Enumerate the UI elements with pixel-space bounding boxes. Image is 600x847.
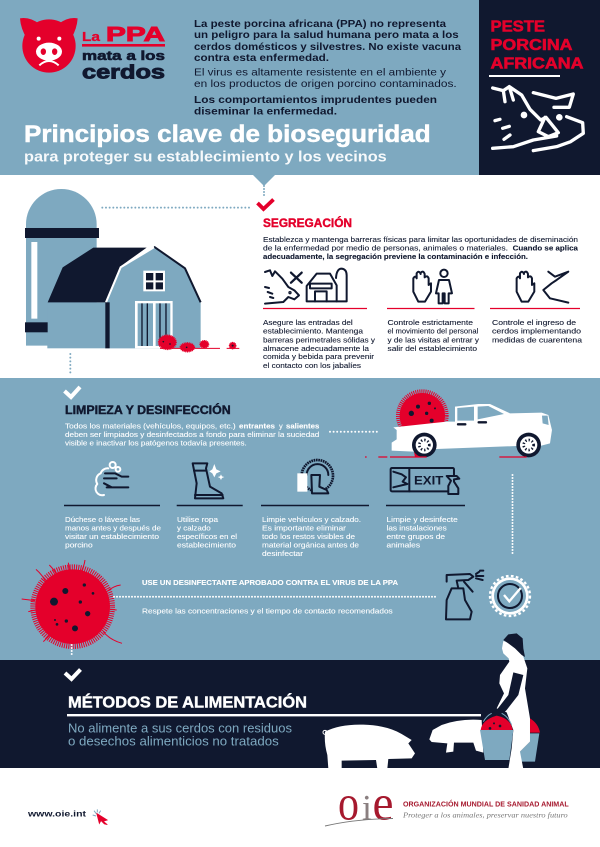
- text: shower or wash hands: porcino: [65, 540, 93, 550]
- logo: La PPA mata a los cerdos: [20, 18, 165, 84]
- text block: introduction: contra esta enfermedad.: [194, 53, 329, 64]
- icon: approval badge: [490, 576, 530, 616]
- text block: cleaning description: visible e inactivar los patógenos todavía presentes.: [65, 439, 247, 448]
- logo wordmark: [82, 24, 165, 84]
- text: use dedicated clothes: y calzado: [177, 524, 211, 532]
- logo wordmark: La: [82, 30, 101, 44]
- divider: feeding heading underline: [67, 714, 481, 716]
- dividers: segregation columns: [263, 308, 580, 310]
- heading: peste porcina africana: AFRICANA: [490, 55, 584, 72]
- text: control people movement: salir del establecimiento: [388, 344, 477, 353]
- text: control people movement: el movimiento del personal: [388, 327, 479, 336]
- text: use approved disinfectant: USE UN DESINFECTANTE APROBADO CONTRA EL VIRUS DE LA PPA: [142, 578, 399, 587]
- logo wordmark: mata a los: [82, 48, 165, 63]
- text block: cleaning description: Todos los materiales (vehículos, equipos, etc.): [65, 421, 236, 430]
- text: control pig entry: cerdos implementando: [492, 327, 581, 336]
- text: use dedicated clothes: específicos en el: [177, 532, 237, 541]
- arrow: notch and dotted connector: [253, 175, 275, 197]
- panel: header background: [0, 0, 479, 175]
- heading: cleaning and disinfection: LIMPIEZA Y DESINFECCIÓN: [65, 402, 231, 417]
- dividers: cleaning columns: [64, 504, 465, 506]
- heading: peste porcina africana: PESTE: [490, 19, 545, 36]
- illustration: pickup truck with virus: [365, 392, 552, 457]
- text: clean vehicles and footwear: material orgánica antes de: [262, 540, 359, 550]
- small pig: [429, 720, 483, 753]
- text: use dedicated clothes: [177, 515, 237, 550]
- illustration: barn and silo: [25, 189, 252, 373]
- text block: segregation description: [263, 235, 579, 261]
- logo wordmark: PPA: [106, 24, 165, 46]
- text block: introduction: El virus es altamente resistente en el ambiente y: [194, 67, 447, 78]
- heading: peste porcina africana: [490, 19, 584, 72]
- virus on truck bed: [398, 392, 446, 440]
- text: control people movement: Controle estrictamente: [388, 318, 473, 327]
- text: control people movement: [388, 318, 479, 353]
- icon: wild boar outline: [493, 87, 583, 151]
- text block: segregation description: de la enfermedad por medio de personas, animales o materiales.: [263, 244, 508, 252]
- text: clean facilities: entre grupos de: [386, 532, 445, 541]
- text block: segregation description: Establezca y mantenga barreras físicas para limitar las oportunidades de diseminación: [263, 235, 578, 244]
- logo: OIE: [325, 774, 569, 830]
- connector: dotted line to truck: [330, 431, 377, 433]
- heading: feeding methods: MÉTODOS DE ALIMENTACIÓN: [68, 694, 307, 712]
- heading: peste porcina africana: PORCINA: [490, 37, 573, 54]
- icon: hand washing: [95, 462, 128, 495]
- logo: OIE: o: [338, 774, 359, 830]
- icon: red cursor: [93, 809, 107, 825]
- text: use dedicated clothes: establecimiento: [177, 540, 236, 550]
- text: control pig entry: [492, 318, 583, 344]
- icon: hand and pig: [517, 272, 568, 303]
- text: secure farm entries: barreras perimetrales sólidas y: [263, 335, 375, 344]
- text: clean vehicles and footwear: Es importante eliminar: [262, 524, 347, 532]
- text block: introduction: La peste porcina africana (PPA) no representa: [194, 19, 446, 30]
- illustration: feeding scene: [323, 633, 540, 769]
- text: tagline: Proteger a los animales, preservar nuestro futuro: [402, 810, 568, 819]
- icon: white check mark, feeding: [65, 670, 80, 679]
- icon: rubber boot: [193, 463, 224, 498]
- text block: feeding advice: [68, 722, 292, 749]
- text: secure farm entries: [263, 318, 375, 370]
- large pig: [323, 725, 415, 769]
- title: key biosecurity principles: [24, 121, 431, 166]
- connector: dotted line from virus to spray: [114, 596, 437, 598]
- icon: boar crossed from farm: [265, 269, 347, 304]
- text: clean vehicles and footwear: desinfectar: [262, 549, 304, 558]
- text: control pig entry: medidas de cuarentena: [492, 335, 583, 344]
- text: clean facilities: [386, 515, 458, 550]
- text block: introduction: diseminar la enfermedad.: [194, 106, 337, 117]
- logo: OIE: i: [362, 788, 372, 828]
- connector: dotted line down from virus: [71, 645, 73, 656]
- text block: cleaning description: [65, 421, 319, 448]
- text: shower or wash hands: Dúchese o lávese las: [65, 515, 140, 524]
- text block: cleaning description: deben ser limpiados y desinfectados a fondo para eliminar la suciedad: [65, 430, 319, 439]
- connector: dotted vertical on right: [512, 475, 514, 556]
- text: clean vehicles and footwear: Limpie vehículos y calzado.: [262, 515, 361, 524]
- text block: segregation description: Cuando se aplica: [513, 244, 579, 252]
- text: clean vehicles and footwear: [262, 515, 361, 558]
- text: organisation name: ORGANIZACIÓN MUNDIAL DE SANIDAD ANIMAL: [403, 800, 569, 809]
- icon: spray bottle: [446, 571, 483, 619]
- text: secure farm entries: Asegure las entradas del: [263, 318, 353, 327]
- title: key biosecurity principles: Principios clave de bioseguridad: [24, 121, 431, 148]
- text: clean facilities: animales: [386, 540, 420, 550]
- text block: introduction: en los productos de origen porcino contaminados.: [194, 79, 457, 90]
- text: clean facilities: las instalaciones: [386, 524, 447, 532]
- text: shower or wash hands: [65, 515, 161, 550]
- text: secure farm entries: almacene adecuadamente la: [263, 344, 370, 353]
- logo: OIE: e: [372, 774, 394, 830]
- text block: feeding advice: No alimente a sus cerdos con residuos: [68, 722, 292, 736]
- icon: exit sign with spray: [391, 468, 459, 494]
- panel: cleaning section background: [0, 378, 600, 660]
- text: secure farm entries: el contacto con los jabalíes: [263, 361, 361, 370]
- text block: segregation description: adecuadamente, la segregación previene la contaminación e infección.: [263, 252, 528, 261]
- link: website address: www.oie.int: [27, 809, 86, 819]
- text block: feeding advice: o desechos alimenticios no tratados: [68, 735, 279, 749]
- text block: introduction: Los comportamientos imprudentes pueden: [194, 95, 437, 106]
- icons: segregation measures: [265, 269, 568, 304]
- text block: introduction: [194, 19, 461, 117]
- text block: cleaning description: entrantes: [239, 421, 275, 430]
- woman carrying buckets: [480, 633, 540, 769]
- icon: hand and protective suit: [413, 270, 452, 303]
- text: secure farm entries: establecimiento. Mantenga: [263, 327, 364, 336]
- title: key biosecurity principles: para proteger su establecimiento y los vecinos: [24, 150, 387, 166]
- text block: introduction: cerdos domésticos y silvestres. No existe vacuna: [194, 42, 461, 53]
- logo wordmark: cerdos: [82, 62, 165, 84]
- text block: introduction: un peligro para la salud humana pero mata a los: [194, 30, 459, 41]
- icon: red check mark: [258, 200, 274, 209]
- text: clean vehicles and footwear: todo los restos visibles de: [262, 532, 355, 541]
- text block: cleaning description: salientes: [286, 421, 319, 430]
- text: shower or wash hands: visitar un establecimiento: [65, 532, 159, 541]
- text: secure farm entries: comida y bebida para prevenir: [263, 352, 375, 361]
- text: respect concentrations: Respete las concentraciones y el tiempo de contacto recomendados: [142, 607, 393, 616]
- text: use dedicated clothes: Utilise ropa: [177, 515, 219, 524]
- text block: cleaning description: y: [279, 421, 283, 430]
- text: control pig entry: Controle el ingreso de: [492, 318, 576, 327]
- icon: tire, glove and boot: [297, 460, 333, 493]
- icon: sad red pig head: [20, 18, 78, 73]
- icon: exit sign with spray: EXIT: [414, 474, 444, 488]
- icon: white check mark, cleaning: [64, 387, 80, 397]
- text: control people movement: y de las visitas al entrar y: [388, 335, 479, 344]
- illustration: large virus particle: [22, 560, 122, 646]
- panel: feeding section background: [0, 660, 600, 768]
- text: clean facilities: Limpie y desinfecte: [386, 515, 458, 524]
- text: shower or wash hands: manos antes y después de: [65, 524, 161, 532]
- heading: segregation: SEGREGACIÓN: [263, 215, 352, 230]
- panel: African swine fever title box: [479, 0, 600, 175]
